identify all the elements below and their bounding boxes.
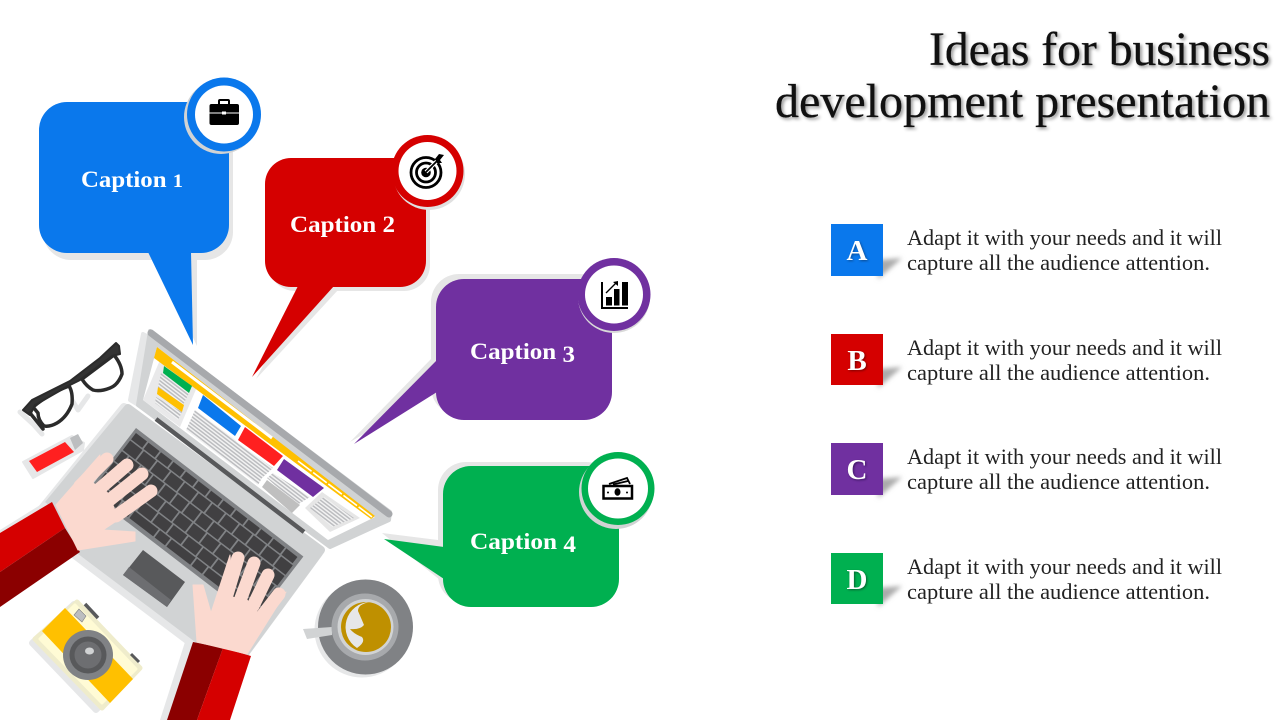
laptop base	[31, 407, 321, 673]
bubble: caption 2	[252, 135, 465, 379]
bubble: caption 4: 4	[563, 532, 577, 557]
list item B: Adapt it with your needs and it will	[907, 335, 1222, 360]
bubble: caption 4	[382, 452, 654, 607]
list item A: A	[847, 235, 868, 267]
bubble: caption 1	[39, 78, 261, 346]
bubble: caption 3: 3	[562, 342, 575, 367]
badge C	[831, 443, 883, 495]
icon: bar chart	[578, 258, 650, 333]
keyboard	[87, 428, 303, 620]
icon: briefcase	[184, 78, 261, 154]
laptop illustration	[31, 331, 390, 673]
USB drive	[23, 434, 84, 478]
touchpad	[123, 550, 185, 607]
list item D: Adapt it with your needs and it will	[907, 554, 1222, 579]
list item C	[831, 443, 1222, 498]
title: Ideas for business	[929, 23, 1270, 76]
badge B	[831, 334, 883, 385]
laptop lid	[130, 331, 390, 547]
camera	[32, 602, 140, 710]
list item C: Adapt it with your needs and it will	[907, 444, 1222, 469]
list item C: C	[847, 454, 867, 486]
right hand	[193, 555, 286, 654]
list item D	[831, 553, 1222, 607]
list item A	[831, 224, 1222, 279]
badge D	[831, 553, 883, 604]
left hand	[56, 455, 151, 550]
list item B	[831, 334, 1222, 388]
coffee cup	[303, 580, 413, 678]
left sleeve	[0, 502, 80, 607]
badge A	[831, 224, 883, 276]
icon: target	[392, 135, 465, 210]
list item B: capture all the audience attention.	[907, 360, 1210, 385]
glasses	[20, 343, 122, 434]
list item A: Adapt it with your needs and it will	[907, 225, 1222, 250]
bubble: caption 3: Caption	[470, 339, 549, 364]
list item A: capture all the audience attention.	[907, 250, 1210, 275]
title	[775, 23, 1270, 128]
list item D: D	[847, 564, 867, 596]
title: development presentation	[775, 75, 1270, 128]
laptop screen	[143, 347, 375, 540]
bubble: caption 4: Caption	[470, 529, 549, 554]
bubble: caption 3	[350, 258, 650, 444]
list item D: capture all the audience attention.	[907, 579, 1210, 604]
list item B: B	[847, 345, 867, 377]
list item C: capture all the audience attention.	[907, 469, 1210, 494]
bubble: caption 2: Caption 2	[290, 212, 395, 237]
bubble: caption 1: Caption 1	[81, 167, 183, 192]
right sleeve	[160, 642, 251, 720]
icon: banknotes	[579, 452, 654, 529]
